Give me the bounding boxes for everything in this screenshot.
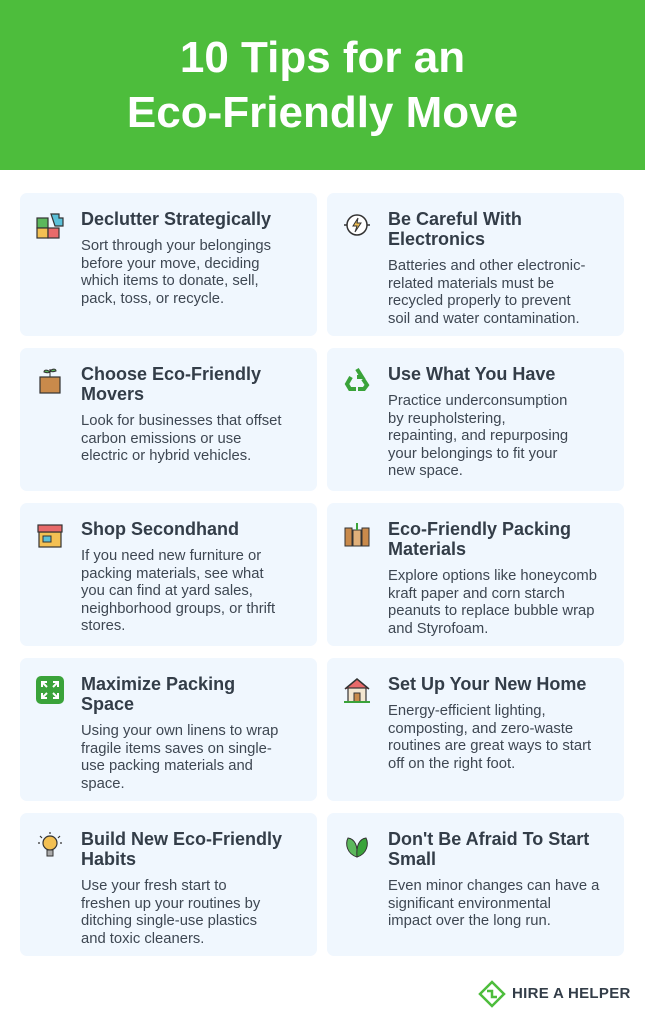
text [81, 878, 260, 947]
heading: Space [81, 694, 134, 714]
text [81, 723, 278, 792]
icon: expand [36, 676, 64, 704]
text: Using your own linens to wrap [81, 723, 278, 739]
heading: Eco-Friendly Packing [388, 519, 571, 539]
card: secondhand [20, 503, 317, 646]
card: new home [327, 658, 624, 801]
icon: box plant [39, 368, 61, 394]
text [388, 703, 591, 772]
heading: Use What You Have [388, 364, 555, 384]
card: electronics [327, 193, 624, 336]
heading: Habits [81, 849, 136, 869]
text: stores. [81, 618, 125, 634]
text: freshen up your routines by [81, 896, 260, 912]
text: off on the right foot. [388, 756, 515, 772]
text: related materials must be [388, 276, 554, 292]
heading: Movers [81, 384, 144, 404]
header [0, 0, 645, 170]
title: 10 Tips for an [180, 33, 465, 82]
text: neighborhood groups, or thrift [81, 601, 275, 617]
text: and toxic cleaners. [81, 931, 204, 947]
text [388, 878, 600, 929]
text: kraft paper and corn starch [388, 586, 565, 602]
heading: Materials [388, 539, 466, 559]
text [388, 258, 585, 327]
heading [81, 829, 282, 869]
heading [388, 519, 571, 559]
logo: Hire A Helper: HIRE A HELPER [512, 985, 631, 1002]
text: Even minor changes can have a [388, 878, 599, 894]
text: soil and water contamination. [388, 311, 580, 327]
heading: Set Up Your New Home [388, 674, 586, 694]
icon: recycle [344, 368, 370, 391]
text: before your move, deciding [81, 256, 260, 272]
text: Explore options like honeycomb [388, 568, 597, 584]
card: use what you have [327, 348, 624, 491]
text: ditching single-use plastics [81, 913, 257, 929]
icon: leaves [346, 838, 368, 858]
text [81, 413, 282, 464]
text: you can find at yard sales, [81, 583, 253, 599]
text [81, 548, 275, 634]
text: Sort through your belongings [81, 238, 271, 254]
logo: Hire A Helper [478, 980, 631, 1008]
title [127, 33, 518, 137]
card: start small [327, 813, 624, 956]
text: Practice underconsumption [388, 393, 567, 409]
text: new space. [388, 463, 463, 479]
heading [81, 674, 235, 714]
text [81, 238, 271, 307]
heading: Electronics [388, 229, 485, 249]
text: by reupholstering, [388, 411, 506, 427]
text: recycled properly to prevent [388, 293, 571, 309]
heading [388, 829, 590, 869]
heading: Don't Be Afraid To Start [388, 829, 589, 849]
heading [388, 209, 522, 249]
heading: Shop Secondhand [81, 519, 239, 539]
card: maximize space [20, 658, 317, 801]
icon: bulb [38, 832, 62, 856]
icon: puzzle [36, 213, 64, 239]
heading: Small [388, 849, 436, 869]
icon: rolls [344, 523, 370, 546]
text: repainting, and repurposing [388, 428, 568, 444]
text: and Styrofoam. [388, 621, 488, 637]
text: packing materials, see what [81, 566, 264, 582]
card: habits [20, 813, 317, 956]
text [388, 393, 568, 479]
icon: plug [344, 214, 370, 236]
text: routines are great ways to start [388, 738, 591, 754]
text: carbon emissions or use [81, 431, 241, 447]
heading [81, 364, 261, 404]
text: space. [81, 776, 125, 792]
text: Energy-efficient lighting, [388, 703, 546, 719]
heading: Be Careful With [388, 209, 522, 229]
heading: Maximize Packing [81, 674, 235, 694]
text: Look for businesses that offset [81, 413, 281, 429]
title: Eco-Friendly Move [127, 88, 518, 137]
text [388, 568, 597, 637]
text: use packing materials and [81, 758, 253, 774]
text: your belongings to fit your [388, 446, 557, 462]
text: If you need new furniture or [81, 548, 261, 564]
text: significant environmental [388, 896, 551, 912]
text: electric or hybrid vehicles. [81, 448, 251, 464]
heading: Declutter Strategically [81, 209, 271, 229]
text: Use your fresh start to [81, 878, 227, 894]
text: fragile items saves on single- [81, 741, 272, 757]
card: declutter [20, 193, 317, 336]
card: movers [20, 348, 317, 491]
text: pack, toss, or recycle. [81, 291, 224, 307]
text: Batteries and other electronic- [388, 258, 585, 274]
heading: Choose Eco-Friendly [81, 364, 261, 384]
heading: Build New Eco-Friendly [81, 829, 282, 849]
icon: shop [37, 524, 63, 548]
card: packing materials [327, 503, 624, 646]
text: composting, and zero-waste [388, 721, 573, 737]
text: which items to donate, sell, [81, 273, 259, 289]
text: impact over the long run. [388, 913, 551, 929]
icon: house [344, 678, 370, 703]
text: peanuts to replace bubble wrap [388, 603, 594, 619]
